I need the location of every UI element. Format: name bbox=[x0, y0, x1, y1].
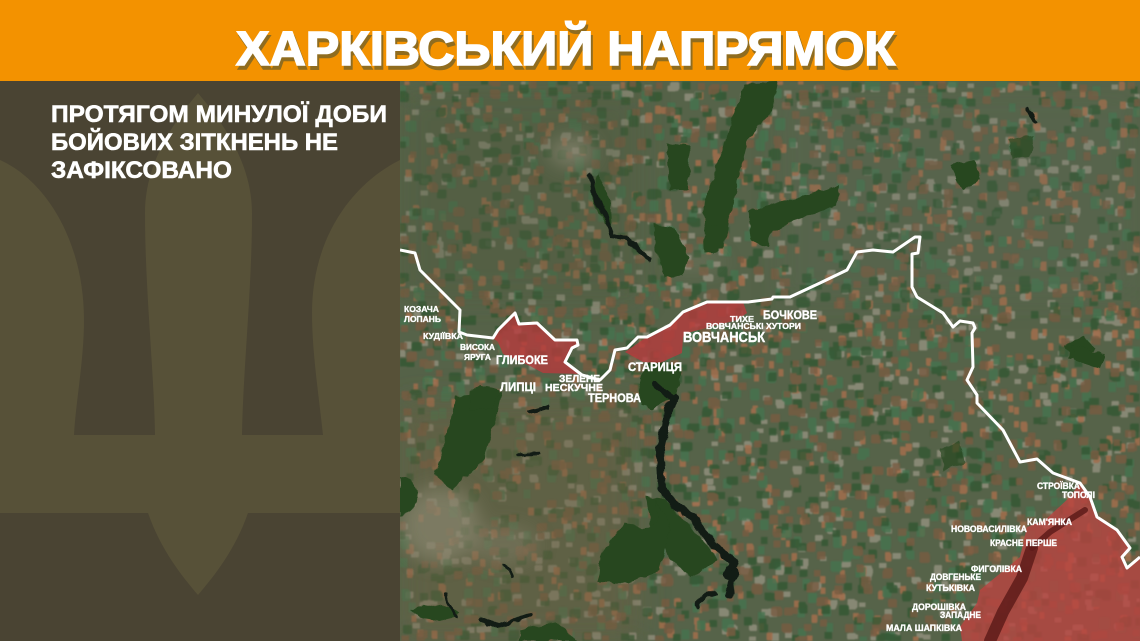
label: ГЛИБОКЕ bbox=[496, 353, 548, 367]
label: ТИХЕ bbox=[730, 314, 754, 324]
panel: left summary bbox=[0, 81, 400, 641]
occupied area: south-east bbox=[960, 483, 1140, 641]
label: КУТЬКІВКА bbox=[926, 583, 975, 594]
label: ЛОПАНЬ bbox=[404, 314, 441, 324]
label: КРАСНЕ ПЕРШЕ bbox=[990, 538, 1057, 549]
label: ЯРУГА bbox=[464, 352, 491, 362]
occupied area: Vovchansk bbox=[625, 302, 747, 363]
label: СТРОЇВКА bbox=[1037, 481, 1080, 492]
label: ЗАПАДНЕ bbox=[940, 610, 981, 621]
summary text: БОЙОВИХ ЗІТКНЕНЬ НЕ bbox=[51, 128, 338, 156]
summary text: ПРОТЯГОМ МИНУЛОЇ ДОБИ bbox=[51, 101, 387, 128]
settlement labels: south-east bbox=[886, 481, 1095, 634]
label: ЗЕЛЕНЕ bbox=[559, 373, 600, 385]
rivers and reservoirs bbox=[445, 108, 1035, 626]
settlement labels: north-west bbox=[404, 304, 641, 405]
regional tint bbox=[400, 90, 1140, 641]
label: КАМ'ЯНКА bbox=[1027, 517, 1072, 528]
label: ДОВГЕНЬКЕ bbox=[930, 572, 981, 583]
label: КОЗАЧА bbox=[404, 304, 439, 314]
label: СТАРИЦЯ bbox=[628, 360, 682, 374]
label: НЕСКУЧНЕ bbox=[545, 382, 603, 394]
label: КУДІЇВКА bbox=[423, 331, 463, 341]
label: ФИГОЛІВКА bbox=[971, 564, 1022, 575]
icon: trident watermark bbox=[0, 93, 400, 595]
label: ТОПОЛІ bbox=[1062, 490, 1095, 501]
label: ВОВЧАНСЬК bbox=[683, 329, 766, 346]
settlement labels: Vovchansk bbox=[628, 308, 817, 374]
label: ЛИПЦІ bbox=[500, 380, 536, 394]
label: БОЧКОВЕ bbox=[763, 308, 817, 322]
label: НОВОВАСИЛІВКА bbox=[951, 524, 1027, 535]
label: ВОВЧАНСЬКІ ХУТОРИ bbox=[706, 321, 801, 331]
label: ТЕРНОВА bbox=[588, 391, 641, 405]
forests bbox=[400, 82, 1105, 641]
title: ХАРКІВСЬКИЙ НАПРЯМОК bbox=[236, 21, 896, 76]
front line bbox=[400, 237, 1140, 568]
urban areas bbox=[400, 138, 725, 565]
occupied area: Hlyboke bbox=[493, 313, 581, 374]
label: ВИСОКА bbox=[460, 342, 495, 352]
label: ДОРОШІВКА bbox=[912, 602, 966, 613]
header band bbox=[0, 0, 1140, 81]
label: МАЛА ШАПКІВКА bbox=[886, 623, 962, 634]
summary text bbox=[51, 101, 387, 184]
satellite map bbox=[400, 81, 1140, 641]
summary text: ЗАФІКСОВАНО bbox=[51, 157, 232, 184]
